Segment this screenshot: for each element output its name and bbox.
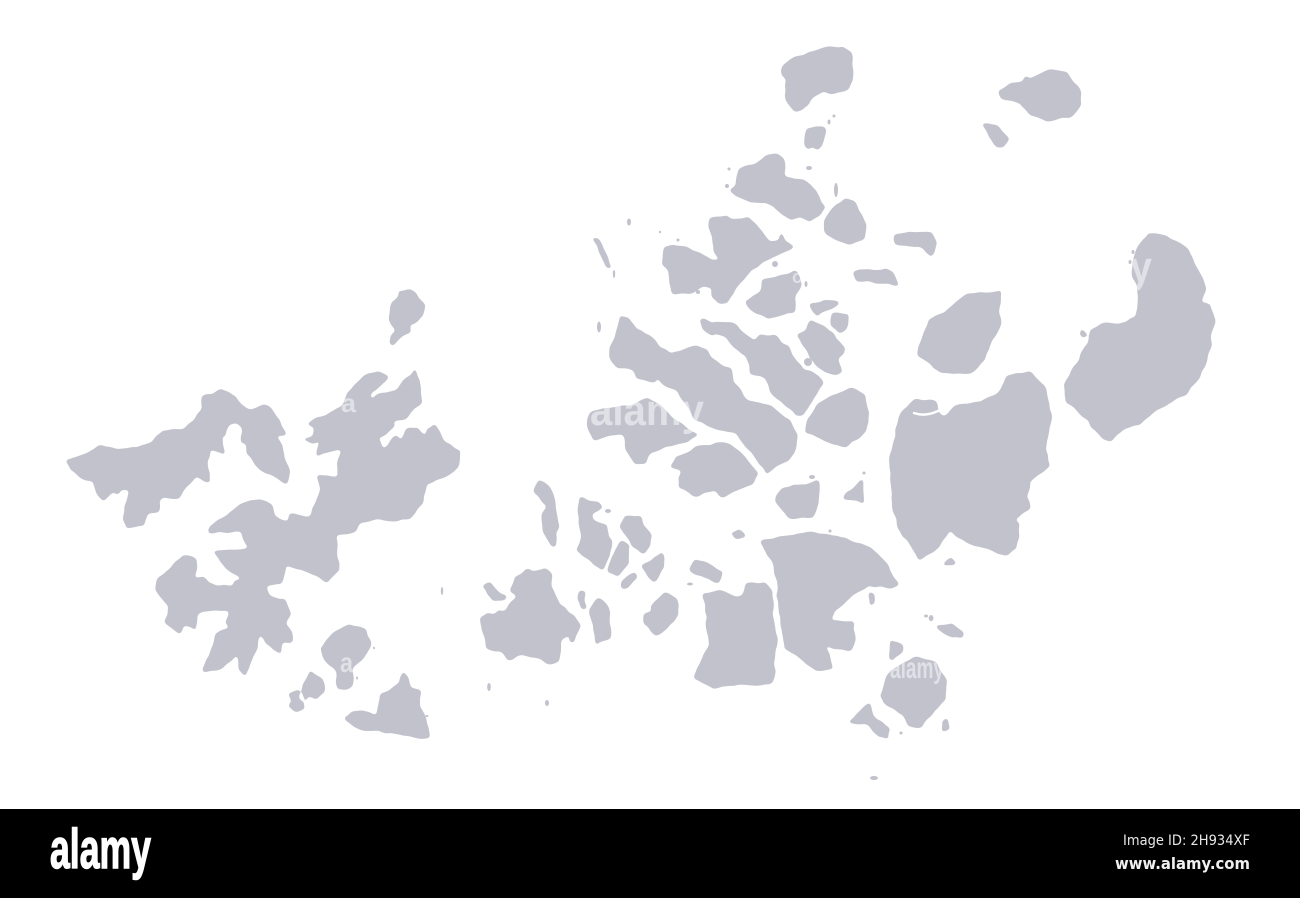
island: diamond <box>643 593 677 636</box>
island: south round <box>320 624 371 690</box>
western island group <box>67 289 460 737</box>
island: tiny east <box>928 615 933 622</box>
island: peninsula <box>663 216 794 303</box>
island: star <box>843 480 864 503</box>
island: top <box>782 47 853 111</box>
island: dot east <box>942 718 950 731</box>
island: big eastern <box>890 372 1051 560</box>
watermark: west: a <box>341 388 357 418</box>
island: narrow sliver <box>593 237 612 267</box>
island: diamond small <box>641 553 664 582</box>
footer bar <box>0 809 1300 898</box>
island: upper strip <box>895 232 938 256</box>
island: crescent <box>482 582 505 601</box>
island: main western landmass <box>157 370 460 675</box>
faint watermark lettering <box>340 243 1152 685</box>
island: tall <box>591 598 610 645</box>
island: thin strip <box>853 269 898 285</box>
watermark: south-west: a <box>340 647 353 678</box>
footer logo: alamy <box>50 817 151 880</box>
island: east small <box>937 623 963 638</box>
island: third diagonal <box>798 320 845 374</box>
island: hooked <box>760 533 898 670</box>
island: long western arm <box>67 390 290 528</box>
island: teardrop <box>918 292 1002 374</box>
island: small crescent <box>289 691 303 712</box>
island: tilted block <box>691 559 723 584</box>
island: square south of oval <box>776 482 818 518</box>
island: south round <box>879 657 945 727</box>
island: pebble <box>622 573 638 587</box>
island: north-west islet <box>390 289 423 345</box>
watermark: far east: y <box>1130 243 1152 292</box>
image id: Image ID: 2H934XF <box>1123 833 1250 849</box>
island: irregular <box>577 498 612 569</box>
island: little oval <box>869 593 875 605</box>
island: sliver near round <box>889 641 903 660</box>
island: large south-west <box>480 569 581 664</box>
map: archipelago silhouette <box>67 47 1214 738</box>
island: small south-west pair <box>303 672 325 703</box>
island: blocky east <box>807 388 868 447</box>
scattered tiny islets <box>356 114 1137 780</box>
island: central round <box>747 272 802 319</box>
island: thin <box>579 592 587 608</box>
island: north-east <box>1000 70 1080 121</box>
inlet in big eastern island <box>914 411 938 415</box>
island: tiny off far east <box>1080 330 1087 339</box>
eastern island group <box>890 70 1214 566</box>
island: south-east <box>345 673 429 737</box>
southern central island group <box>480 480 963 738</box>
watermark: central: alamy <box>590 386 704 435</box>
central northern island group <box>587 47 898 497</box>
island: small below top <box>804 126 826 150</box>
island: small square <box>832 313 848 333</box>
island: tall slim <box>534 480 558 545</box>
island: far east <box>1064 233 1214 441</box>
island: second diagonal <box>700 318 823 415</box>
island: rectangular <box>693 583 777 688</box>
watermark: south island: alamy <box>890 652 944 685</box>
island: small dome <box>733 530 745 538</box>
website: www.alamy.com <box>1115 854 1250 873</box>
island: tiny wedge <box>943 558 957 566</box>
island: oval <box>620 516 652 553</box>
island: south-west of diagonal <box>587 398 697 463</box>
island: north round <box>824 199 867 243</box>
island: triangle <box>848 704 890 738</box>
island: north body <box>730 154 823 221</box>
island: large central diagonal <box>610 317 797 473</box>
island: small north-east <box>983 124 1010 147</box>
island: oval below diagonal <box>670 443 757 497</box>
watermark: central small: c <box>792 267 802 287</box>
island: small pair <box>810 300 838 315</box>
island: sliver <box>608 541 630 575</box>
